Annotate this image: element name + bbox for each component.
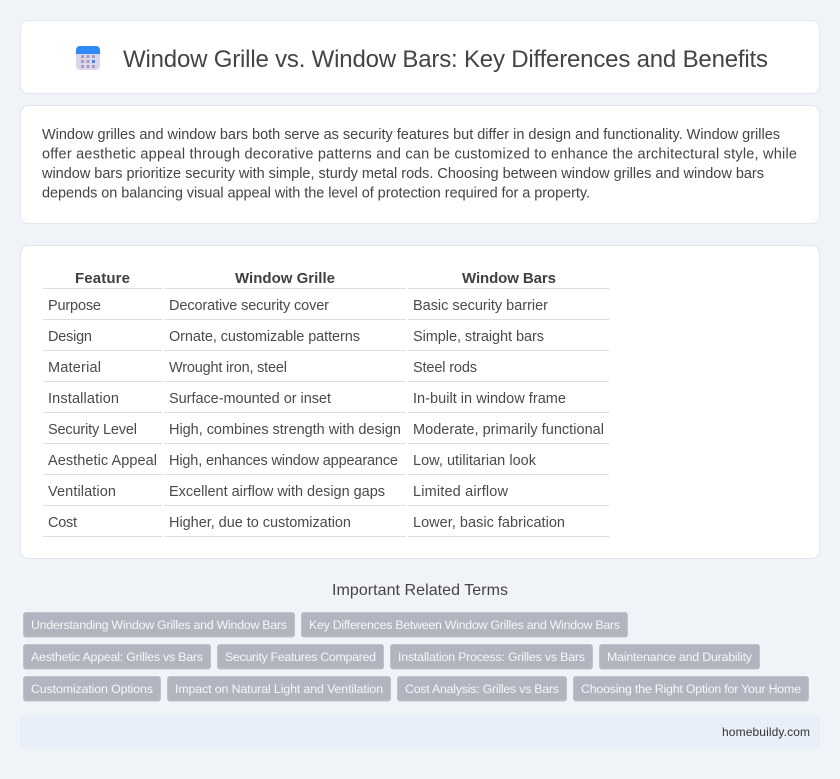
row: installation: Installation [48, 391, 119, 407]
text block: introduction: offer aesthetic appeal through decorative patterns and can be customized to enhance the architectural style, while [42, 146, 797, 162]
row: material: Steel rods [413, 360, 477, 376]
tag: choosing [574, 676, 808, 701]
row: design: Ornate, customizable patterns [169, 329, 360, 345]
tag: maintenance [600, 644, 760, 669]
tag: aesthetic appeal [24, 644, 210, 669]
tag: cost analysis [398, 676, 566, 701]
row: security level: Security Level [48, 422, 137, 438]
tag: customization: Customization Options [31, 682, 153, 696]
tag: key differences: Key Differences Between Window Grilles and Window Bars [309, 618, 620, 632]
tag: natural light [168, 676, 390, 701]
row: installation: In-built in window frame [413, 391, 566, 407]
tag: installation process: Installation Process: Grilles vs Bars [398, 650, 585, 664]
row: purpose [48, 298, 548, 314]
row: design: Design [48, 329, 92, 345]
row: design: Simple, straight bars [413, 329, 544, 345]
tag: security features [218, 644, 384, 669]
row: ventilation: Limited airflow [413, 484, 509, 500]
panel: comparison table [20, 246, 820, 558]
row: ventilation: Ventilation [48, 484, 116, 500]
tag: customization [24, 676, 160, 701]
row: cost [48, 515, 565, 531]
row: installation [48, 391, 566, 407]
tag: aesthetic appeal: Aesthetic Appeal: Grilles vs Bars [31, 650, 203, 664]
row: ventilation [48, 484, 509, 500]
text block: introduction: Window grilles and window bars both serve as security features but differ in design and functionality. Window grilles [42, 127, 780, 143]
text block: introduction [41, 127, 797, 202]
panel: introduction [20, 106, 820, 224]
heading: related terms: Important Related Terms [332, 582, 508, 599]
footer [20, 715, 820, 749]
row: aesthetic appeal: High, enhances window appearance [169, 453, 398, 469]
row: aesthetic appeal: Aesthetic Appeal [48, 453, 157, 469]
table header [75, 270, 556, 287]
text block: introduction: depends on balancing visual appeal with the level of protection required for a property. [42, 186, 590, 202]
table header: Window Bars [462, 270, 556, 287]
row: material: Wrought iron, steel [169, 360, 287, 376]
table header: Feature [75, 270, 130, 287]
row: cost: Higher, due to customization [169, 515, 351, 531]
tag: installation process [390, 644, 592, 669]
footer: homebuildy.com [722, 725, 810, 739]
text block: introduction: window bars prioritize security with simple, sturdy metal rods. Choosing between window grilles and window bars [41, 166, 764, 182]
row: material: Material [48, 360, 101, 376]
row: design [48, 329, 544, 345]
row: aesthetic appeal: Low, utilitarian look [413, 453, 537, 469]
tag: understanding [24, 612, 294, 637]
tag: maintenance: Maintenance and Durability [607, 650, 753, 664]
panel: header [20, 20, 820, 94]
row: security level: High, combines strength with design [169, 422, 401, 438]
tag: cost analysis: Cost Analysis: Grilles vs Bars [405, 682, 559, 696]
tag: natural light: Impact on Natural Light and Ventilation [175, 682, 383, 696]
tag: choosing: Choosing the Right Option for Your Home [581, 682, 801, 696]
row: purpose: Basic security barrier [413, 298, 548, 314]
tag: key differences [302, 612, 628, 637]
tag: understanding: Understanding Window Grilles and Window Bars [31, 618, 287, 632]
row: security level [48, 422, 604, 438]
row: cost: Lower, basic fabrication [413, 515, 565, 531]
panel: related terms [24, 582, 808, 701]
row: security level: Moderate, primarily functional [413, 422, 604, 438]
title: Window Grille vs. Window Bars: Key Differences and Benefits [123, 46, 768, 73]
table rules [43, 288, 609, 537]
icon: calendar [76, 46, 100, 70]
row: purpose: Decorative security cover [169, 298, 329, 314]
row: ventilation: Excellent airflow with design gaps [169, 484, 385, 500]
row: aesthetic appeal [48, 453, 537, 469]
row: material [48, 360, 477, 376]
tag: security features: Security Features Compared [225, 650, 376, 664]
row: purpose: Purpose [48, 298, 101, 314]
table header: Window Grille [235, 270, 335, 287]
row: cost: Cost [48, 515, 77, 531]
row: installation: Surface-mounted or inset [169, 391, 331, 407]
